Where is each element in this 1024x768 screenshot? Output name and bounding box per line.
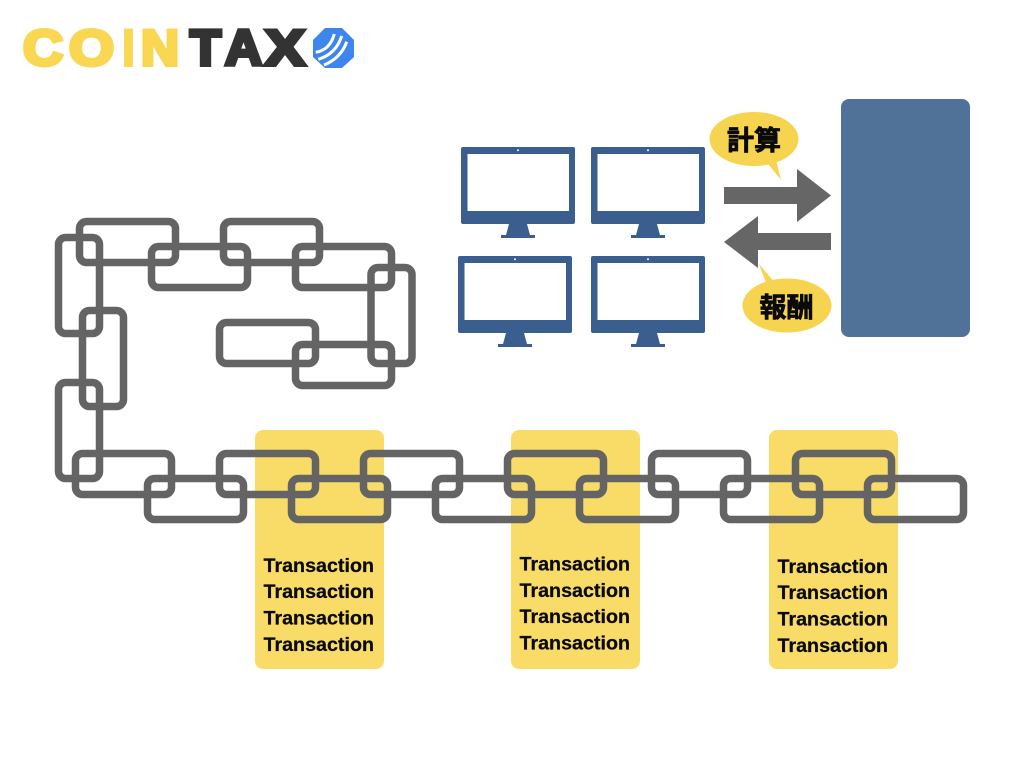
callout: calculation [710, 112, 798, 180]
text: block 3 transaction list: Transaction [778, 556, 888, 578]
text: block 2 transaction list [520, 554, 630, 654]
text: block 1 transaction list: Transaction [264, 608, 374, 630]
icon: computer bottom right [591, 256, 705, 347]
arrow: server to computers [724, 216, 831, 268]
text: block 3 transaction list: Transaction [778, 608, 888, 630]
logo text: I [123, 20, 134, 76]
logo: COINTAX [23, 20, 354, 76]
text: block 1 transaction list: Transaction [264, 555, 374, 577]
text: block 3 transaction list [778, 556, 888, 657]
panel: block 1 transactions [255, 430, 384, 669]
icon: blue octagon coin [313, 28, 354, 68]
text: block 3 transaction list: Transaction [778, 582, 888, 604]
logo text: O [69, 20, 114, 76]
logo text: C [23, 20, 63, 76]
text: block 3 transaction list: Transaction [778, 635, 888, 657]
logo text: N [141, 20, 179, 76]
callout: reward [742, 264, 832, 332]
text: block 2 transaction list: Transaction [520, 580, 630, 602]
callout: calculation: 計算 [727, 126, 781, 156]
text: block 1 transaction list: Transaction [264, 581, 374, 603]
logo text [23, 20, 305, 76]
text: block 2 transaction list: Transaction [520, 606, 630, 628]
panel: server block [841, 99, 970, 337]
logo text: T [190, 20, 221, 76]
icon: computer top right [591, 147, 705, 238]
chain of blocks [58, 222, 964, 520]
arrow: computers to server [724, 169, 831, 222]
text: block 1 transaction list [264, 555, 374, 656]
panel: block 2 transactions [511, 430, 640, 669]
text: block 2 transaction list: Transaction [520, 632, 630, 654]
logo text: X [265, 20, 305, 76]
logo text: A [225, 20, 262, 76]
text: block 1 transaction list: Transaction [264, 634, 374, 656]
callout: reward: 報酬 [760, 293, 814, 323]
panel: block 3 transactions [769, 430, 898, 669]
text: block 2 transaction list: Transaction [520, 554, 630, 576]
icon: computer top left [461, 147, 575, 238]
icon: computer bottom left [458, 256, 572, 347]
